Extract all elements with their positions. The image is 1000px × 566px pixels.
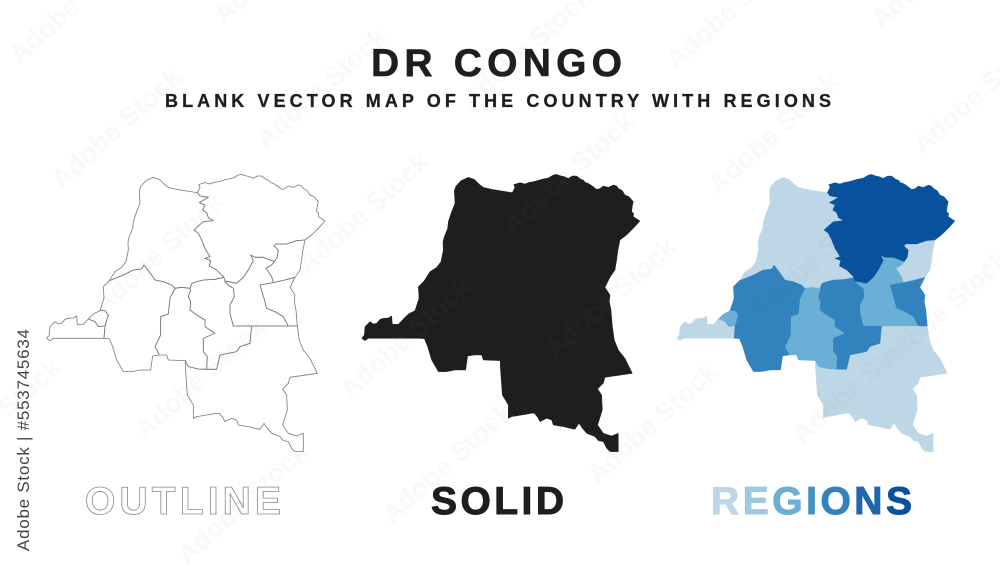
watermark: Adobe Stock — [87, 186, 230, 319]
map: outline — [47, 174, 325, 452]
stock id text: Adobe Stock | #553745634 — [14, 329, 33, 551]
watermark: Adobe Stock — [702, 66, 845, 199]
watermark: Adobe Stock — [744, 191, 887, 324]
label: solid: SOLID — [431, 480, 564, 523]
subtitle: BLANK VECTOR MAP OF THE COUNTRY WITH REGIONS — [165, 91, 831, 111]
watermark: Adobe Stock — [581, 356, 724, 489]
watermark: Adobe Stock — [171, 436, 314, 566]
watermark: Adobe Stock — [129, 311, 272, 444]
label: outline: OUTLINE — [85, 480, 281, 523]
label: regions: REGIONS — [711, 480, 912, 523]
watermark: Adobe Stock — [497, 106, 640, 239]
watermark: Adobe Stock — [45, 61, 188, 194]
watermark: Adobe Stock — [786, 316, 929, 449]
map: regions — [677, 174, 955, 452]
watermark: Adobe Stock — [539, 231, 682, 364]
watermark: Adobe Stock — [292, 146, 435, 279]
watermark: Adobe Stock — [334, 271, 477, 404]
watermark: Adobe Stock — [250, 21, 393, 154]
watermark: Adobe Stock — [376, 396, 519, 529]
map: solid — [362, 174, 640, 452]
title: DR CONGO — [371, 42, 622, 85]
